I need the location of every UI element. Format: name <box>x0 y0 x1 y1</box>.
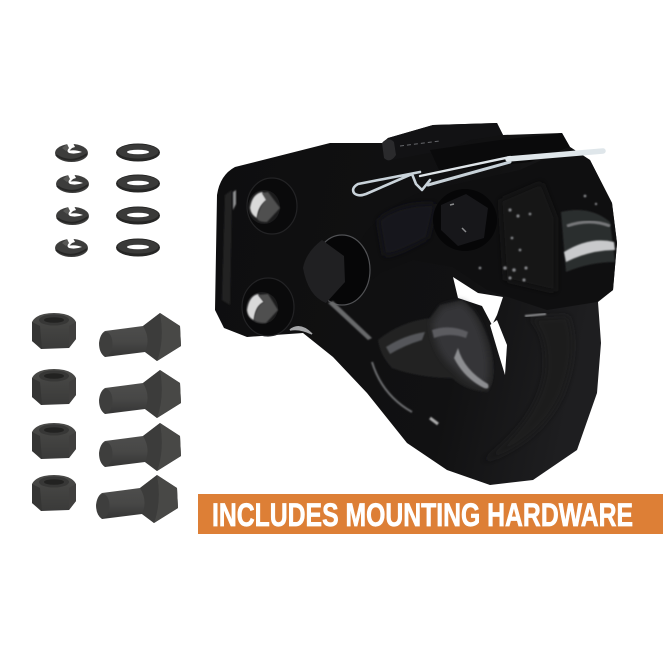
latch body <box>355 147 617 310</box>
cotter pin <box>353 151 603 195</box>
latch bolt recess <box>433 189 497 251</box>
plate left sheen <box>222 190 232 305</box>
ball reflection <box>454 348 488 388</box>
latch glossy side <box>561 210 615 272</box>
pivot bolt collar <box>314 235 370 305</box>
banner: includes mounting hardware <box>198 494 663 534</box>
pintle hook <box>215 123 617 485</box>
upper hole boss <box>247 178 297 234</box>
latch casting marks <box>479 195 597 282</box>
latch raised shoulder <box>430 133 570 172</box>
pivot bolt head <box>303 240 345 303</box>
lower mounting hole <box>246 292 278 324</box>
lunette ball <box>378 300 494 392</box>
gusset highlight <box>328 301 372 340</box>
icon: hex nuts <box>32 313 76 511</box>
icon: lock washers <box>55 143 89 257</box>
latch tube <box>383 123 503 160</box>
hook body silhouette <box>215 123 617 485</box>
hook opening upper <box>453 277 503 325</box>
ball center <box>432 302 489 386</box>
icon: hex bolts <box>96 313 181 523</box>
lower hole boss <box>242 278 294 336</box>
hook gloss streaks <box>372 362 438 424</box>
icon: flat washers <box>116 144 160 256</box>
latch texture <box>378 204 436 256</box>
hook opening right <box>490 320 507 375</box>
hook sheen <box>482 316 573 462</box>
upper mounting hole <box>248 190 280 224</box>
